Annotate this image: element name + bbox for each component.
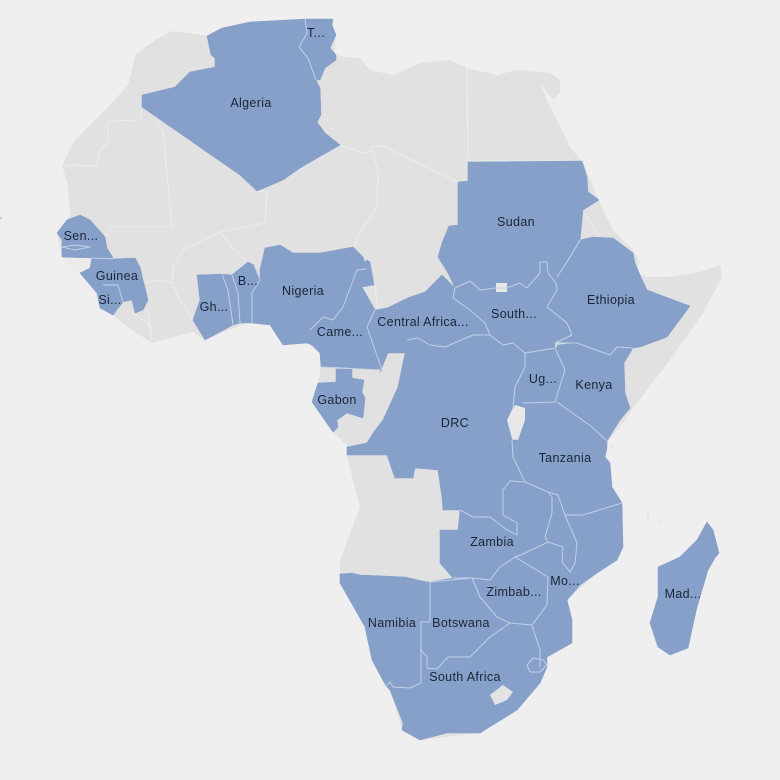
lake [507, 405, 525, 440]
label: south africa: South Africa [429, 670, 501, 684]
benin [232, 262, 260, 323]
label: senegal: Sen... [64, 229, 98, 243]
islands and flecks [0, 216, 662, 522]
label: sierra leone: Si... [98, 293, 122, 307]
label: guinea: Guinea [96, 269, 138, 283]
label: zimbabwe: Zimbab... [486, 585, 542, 599]
guinea-bissau coast [62, 258, 92, 273]
label: ethiopia: Ethiopia [587, 293, 635, 307]
label: ghana: Gh... [200, 300, 228, 314]
central african republic [367, 275, 490, 372]
label: zambia: Zambia [470, 535, 514, 549]
highlighted countries [57, 19, 719, 740]
label: algeria: Algeria [230, 96, 272, 110]
abyei [496, 283, 507, 292]
togo [222, 274, 240, 325]
tanzania [512, 402, 622, 515]
kenya [555, 343, 633, 441]
label: botswana: Botswana [432, 616, 490, 630]
lesotho [490, 685, 513, 705]
nigeria [252, 245, 367, 345]
tunisia [299, 19, 336, 80]
label: tunisia: T... [307, 26, 325, 40]
country labels [64, 26, 701, 684]
label: kenya: Kenya [575, 378, 613, 392]
south sudan [453, 262, 572, 353]
ethiopia [547, 237, 690, 355]
namibia [340, 573, 430, 688]
madagascar [650, 522, 719, 655]
malawi [545, 492, 577, 572]
botswana [421, 578, 510, 669]
label: nigeria: Nigeria [282, 284, 324, 298]
label: sudan: Sudan [497, 215, 535, 229]
label: tanzania: Tanzania [539, 451, 591, 465]
south africa [386, 623, 547, 740]
zanzibar islands [612, 444, 614, 450]
label: madagascar: Mad... [665, 587, 701, 601]
guinea [80, 258, 148, 313]
gray country borders [62, 68, 648, 340]
zimbabwe [472, 557, 548, 625]
mozambique [515, 503, 623, 667]
dr congo [347, 335, 525, 535]
label: namibia: Namibia [368, 616, 416, 630]
label: cameroon: Came... [317, 325, 363, 339]
label: central african republic: Central Africa... [377, 315, 469, 329]
cameroon [310, 260, 382, 370]
blue country borders [62, 19, 633, 688]
zambia [440, 481, 552, 580]
label: uganda: Ug... [529, 372, 557, 386]
ghana [193, 274, 233, 340]
label: benin: B... [238, 274, 258, 288]
label: gabon: Gabon [317, 393, 357, 407]
label: mozambique: Mo... [550, 574, 580, 588]
label: drc: DRC [441, 416, 469, 430]
label: south sudan: South... [491, 307, 537, 321]
senegal [57, 215, 113, 258]
sierra leone [97, 285, 123, 315]
sudan [438, 161, 599, 290]
algeria [142, 19, 340, 191]
gabon [312, 369, 365, 432]
uganda [513, 347, 565, 407]
